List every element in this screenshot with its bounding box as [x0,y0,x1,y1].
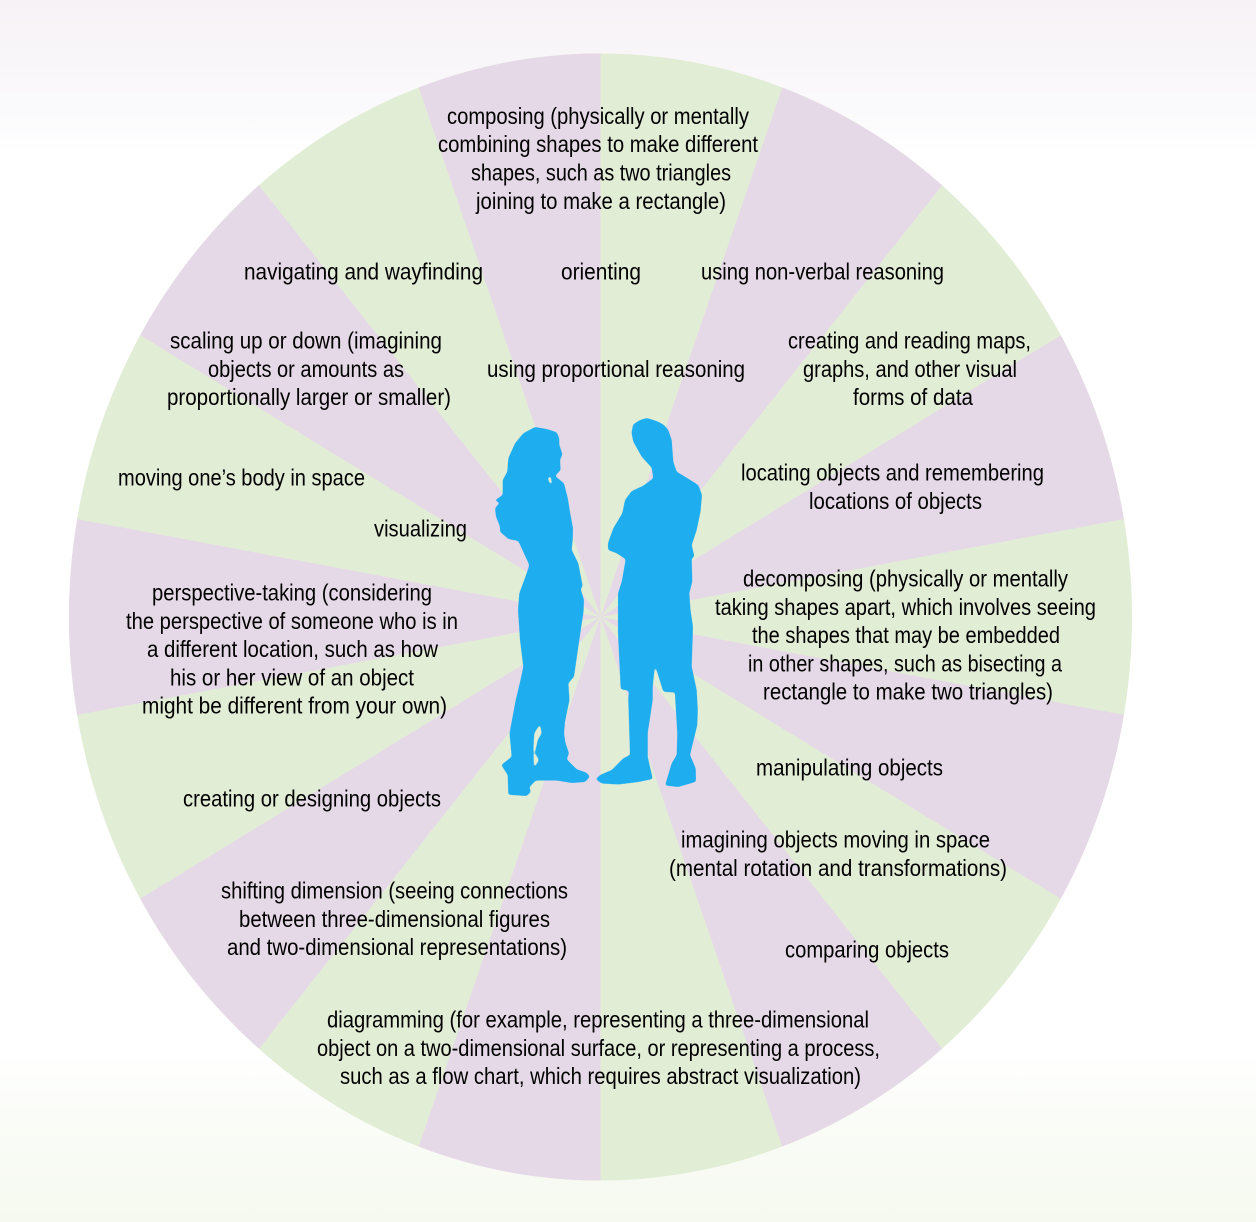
label: decomposing: decomposing (physically or mentally [743,566,1068,592]
label: decomposing [715,566,1096,705]
radial wheel of alternating segments [69,54,1132,1180]
label: diagramming: diagramming (for example, representing a three-dimensional [327,1006,869,1032]
label: decomposing: in other shapes, such as bisecting a [748,650,1063,676]
label: perspective-taking: perspective-taking (considering [152,580,432,606]
label: perspective-taking: might be different from your own) [142,693,447,719]
label: diagramming [317,1006,880,1089]
label: scaling up or down: objects or amounts as [208,356,404,382]
label: creating or designing objects: creating or designing objects [183,786,441,812]
label: decomposing: rectangle to make two triangles) [763,679,1053,705]
label: composing: joining to make a rectangle) [475,188,726,214]
label: composing [438,103,758,214]
label: shifting dimension: shifting dimension (seeing connections [221,878,568,904]
label: manipulating objects: manipulating objects [756,754,943,780]
label: decomposing: the shapes that may be embedded [752,622,1060,648]
label: composing: combining shapes to make different [438,131,758,157]
label: navigating and wayfinding: navigating and wayfinding [244,258,483,284]
label: perspective-taking: his or her view of an object [170,664,414,690]
label: creating and reading maps: creating and reading maps, [788,328,1031,354]
label: scaling up or down: scaling up or down (imagining [170,328,442,354]
icon: man silhouette [596,418,702,787]
label: orienting: orienting [561,258,641,284]
label: diagramming: such as a flow chart, which requires abstract visualization) [340,1063,861,1089]
label: visualizing: visualizing [374,516,467,542]
label: imagining objects moving in space [669,826,1007,881]
label: locating objects [741,460,1044,514]
all text labels [118,103,1096,1089]
label: creating and reading maps [788,328,1031,410]
label: perspective-taking: the perspective of someone who is in [126,608,458,634]
label: imagining objects moving in space: imagining objects moving in space [681,826,990,852]
label: decomposing: taking shapes apart, which involves seeing [715,594,1096,620]
label: shifting dimension [221,878,568,960]
icon: woman silhouette [494,427,590,796]
label: creating and reading maps: forms of data [853,384,974,410]
label: locating objects: locating objects and remembering [741,460,1044,486]
label: creating and reading maps: graphs, and other visual [803,356,1017,382]
label: diagramming: object on a two-dimensional surface, or representing a process, [317,1035,880,1061]
label: moving one's body in space: moving one’s body in space [118,464,365,490]
label: imagining objects moving in space: (mental rotation and transformations) [669,855,1007,881]
label: comparing objects: comparing objects [785,936,949,962]
label: scaling up or down: proportionally larger or smaller) [167,384,451,410]
label: perspective-taking [126,580,458,719]
label: shifting dimension: and two-dimensional representations) [227,934,567,960]
label: composing: shapes, such as two triangles [471,160,731,186]
label: composing: composing (physically or mentally [447,103,749,129]
label: using proportional reasoning: using proportional reasoning [487,356,745,382]
label: using non-verbal reasoning: using non-verbal reasoning [701,258,944,284]
label: shifting dimension: between three-dimensional figures [239,906,550,932]
label: perspective-taking: a different location, such as how [147,636,439,662]
label: locating objects: locations of objects [809,488,982,514]
label: scaling up or down [167,328,451,410]
